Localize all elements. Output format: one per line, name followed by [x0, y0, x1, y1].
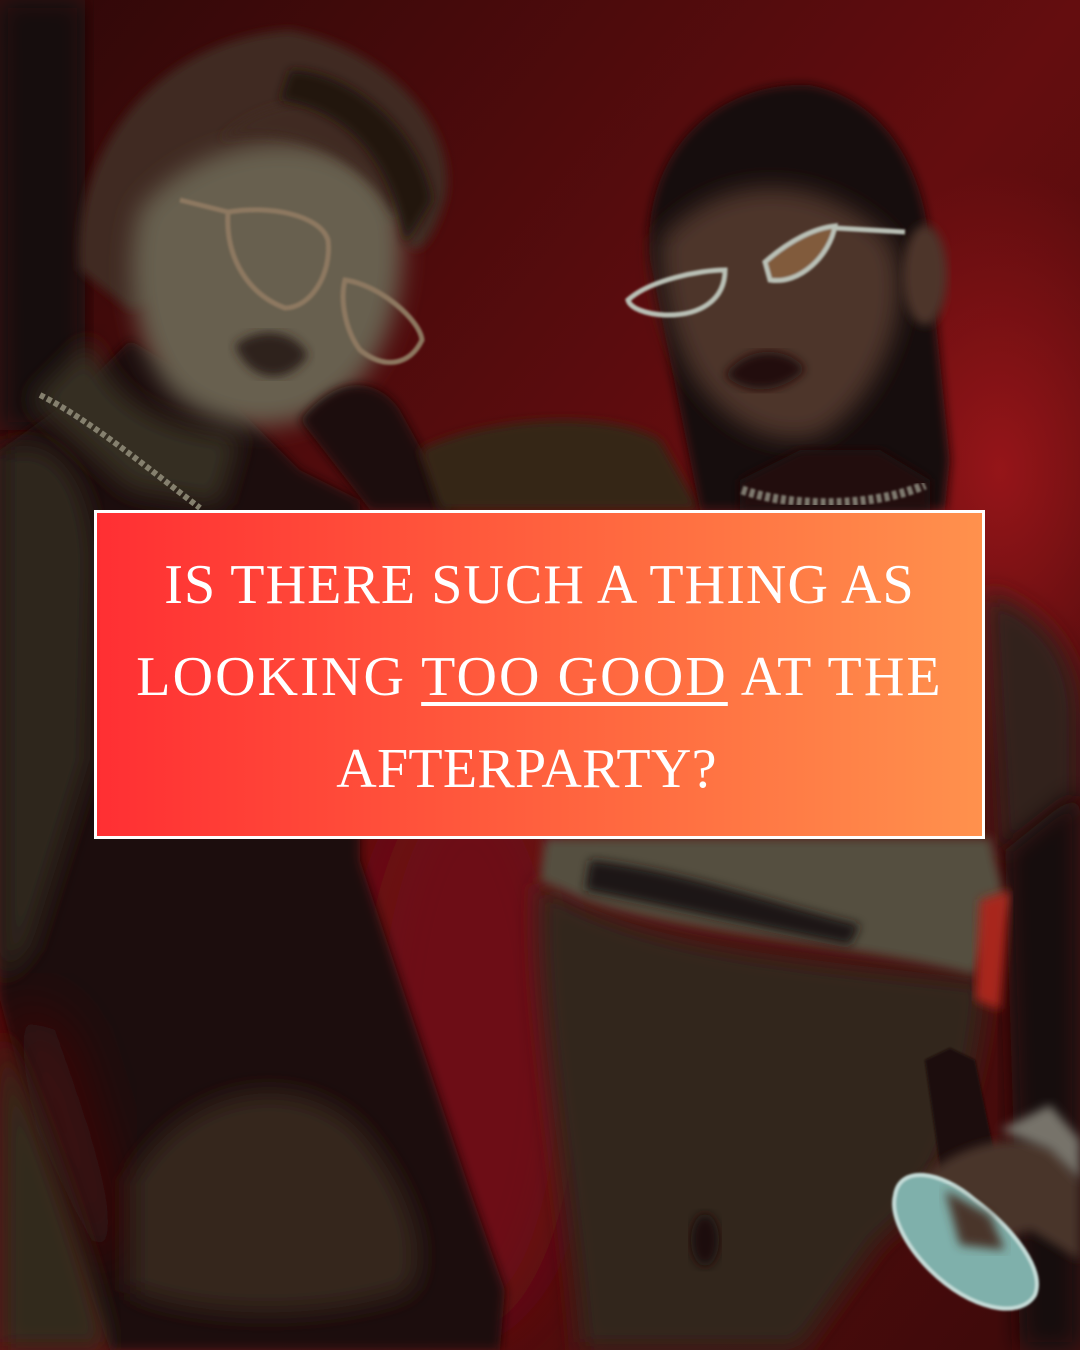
headline text: IS THERE SUCH A THING AS — [164, 554, 915, 616]
person right — [420, 85, 1080, 1350]
person left — [0, 30, 505, 1350]
hand — [920, 1140, 1080, 1260]
headline panel — [94, 510, 985, 839]
right person top — [540, 838, 1005, 975]
bottle — [925, 1048, 1000, 1200]
right person glasses — [628, 226, 905, 315]
right person necklace — [742, 485, 925, 503]
cup — [894, 1175, 1037, 1309]
left person glasses — [180, 200, 422, 362]
headline text: LOOKING TOO GOOD AT THE — [136, 646, 943, 708]
headline text: AFTERPARTY? — [336, 738, 717, 800]
headline text — [136, 554, 943, 800]
left person necklace — [40, 395, 200, 508]
